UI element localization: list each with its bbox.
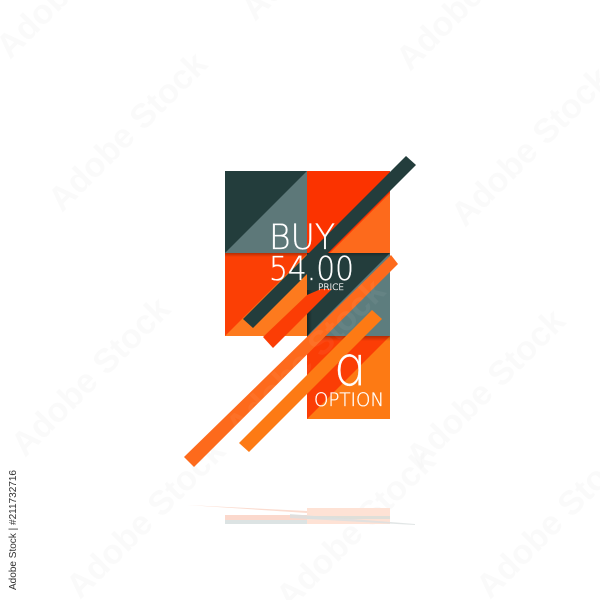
square grid [225, 171, 390, 419]
red diagonal bar [263, 289, 332, 348]
letter: a: ɑ [332, 334, 365, 398]
label: PRICE: PRICE [318, 283, 344, 293]
watermark pattern: Adobe Stock [4, 290, 178, 464]
caption: stock id: Adobe Stock | #211732716 [7, 470, 19, 590]
short orange diagonal bar [239, 310, 382, 452]
panel: middle left square [225, 253, 307, 336]
long orange diagonal bar [184, 255, 398, 467]
heading: BUY: BUY [269, 218, 335, 258]
watermark pattern: Adobe Stock [399, 302, 573, 476]
overlay watermark: Adobe Stock [219, 272, 393, 446]
label: OPTION: OPTION [314, 389, 384, 411]
floor reflection [187, 505, 415, 525]
price: 54.00: 54.00 [269, 249, 354, 288]
panel: top right square [307, 171, 390, 253]
panel: middle right square [307, 253, 390, 336]
watermark pattern: Adobe Stock [41, 45, 215, 219]
panel: top left square [225, 171, 307, 253]
dark diagonal bar [243, 156, 416, 328]
panel: bottom square [307, 336, 390, 419]
